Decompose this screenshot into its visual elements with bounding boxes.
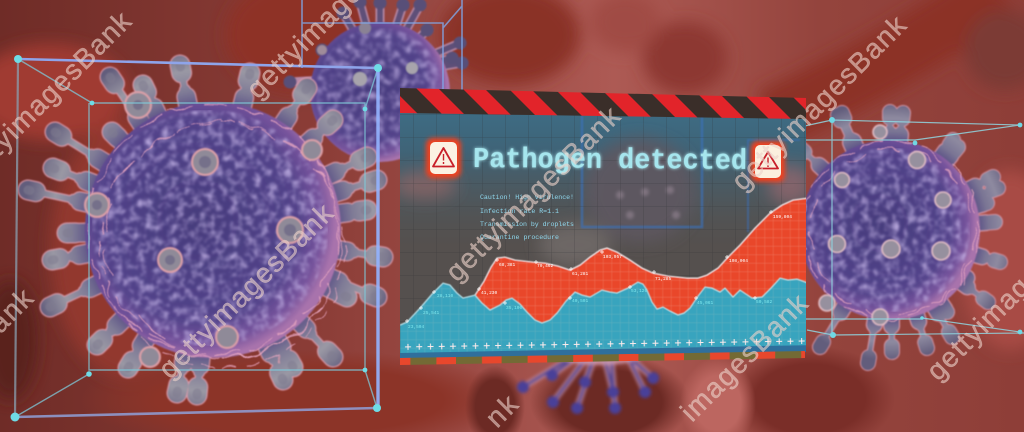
chart: data point labels: 103,957	[603, 254, 622, 260]
right virus body	[800, 140, 980, 320]
title: Pathogen detected: Pathogen detected	[473, 143, 747, 178]
chart: data point labels: 68,381	[499, 262, 516, 268]
text block: warnings	[480, 194, 574, 241]
chart: blue area	[400, 278, 808, 358]
chart: data point labels: 70,462	[537, 263, 554, 269]
virus: main, left	[28, 65, 383, 395]
text block: warnings: Infection rate R=1.1	[480, 208, 559, 215]
screen background	[393, 110, 812, 360]
chart: red area	[474, 197, 806, 323]
wireframe box: top virus	[302, 0, 462, 92]
right virus spikes	[800, 112, 1000, 363]
virus: right	[800, 112, 1000, 363]
main virus body	[85, 102, 341, 358]
chart: data point labels: 108,004	[729, 258, 748, 264]
hazard stripe: bottom	[400, 351, 805, 365]
icon: right warning sign	[751, 141, 785, 182]
chart: data point labels: 71,285	[655, 276, 672, 282]
chart: data point labels: 159,804	[773, 214, 792, 220]
chart: data point labels	[405, 210, 792, 330]
chart: data point labels: 28,110	[437, 293, 454, 299]
text block: warnings: Quarantine procedure	[480, 234, 559, 241]
main virus front spikes	[85, 92, 322, 367]
wireframe box: main virus	[10, 55, 382, 422]
main virus spikes	[28, 65, 383, 395]
chart: data point labels: 41,230	[481, 290, 498, 296]
virus: bottom, blurred	[523, 325, 658, 408]
chart: data point labels: 50,582	[756, 299, 773, 305]
watermarks: nk	[479, 388, 525, 432]
right virus front spikes	[819, 125, 951, 325]
chart: data point labels: 35,100	[506, 305, 523, 311]
text block: warnings: Transmission by droplets	[480, 221, 574, 228]
watermarks: imagesBank	[674, 287, 814, 427]
chart: data point labels: 25,541	[423, 310, 440, 316]
watermarks: gettyimagesBank	[725, 9, 913, 196]
icon: left warning sign	[426, 138, 461, 178]
text block: warnings: Caution! High virulence!	[480, 194, 574, 201]
watermarks: gettyimagesBank	[152, 197, 340, 384]
chart: data point labels: 23,504	[408, 324, 425, 330]
chart: plus markers	[404, 338, 805, 350]
chart: data point labels: 53,120	[631, 288, 648, 294]
chart: data point labels: 40,501	[572, 298, 589, 304]
hazard stripe: top	[400, 88, 806, 119]
chart: data point labels: 45,061	[697, 300, 714, 306]
virus: top, behind the main one	[290, 2, 462, 162]
chart: data point labels: 61,281	[572, 271, 589, 277]
panel: pathogen detected screen	[393, 88, 812, 365]
wireframe box: right virus	[800, 117, 1024, 338]
watermarks: gettyimagesBank	[439, 100, 627, 287]
